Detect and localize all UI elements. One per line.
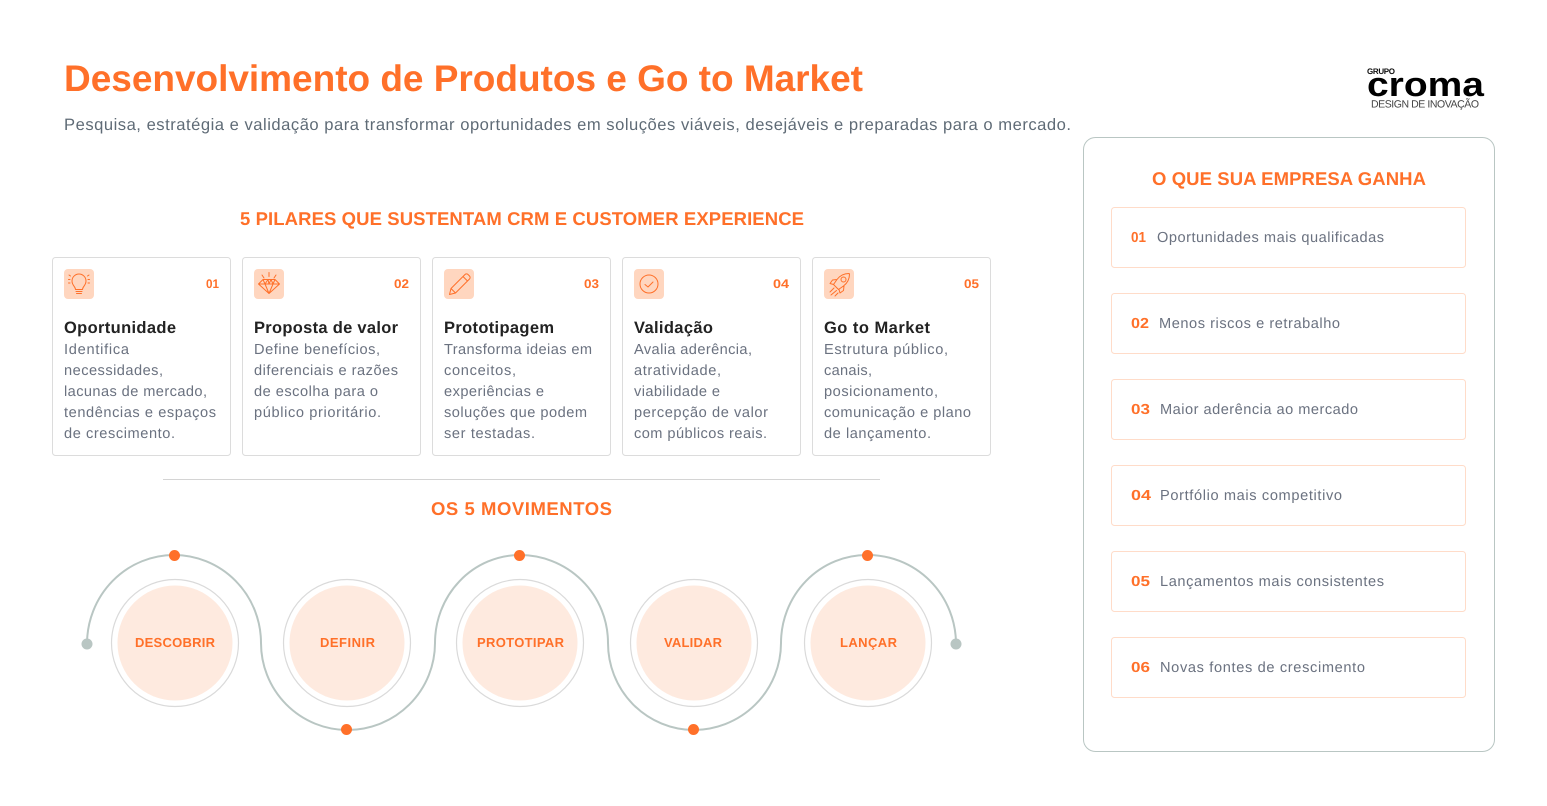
- panel: card 04 Validação: Validação: [634, 319, 713, 337]
- panel: card 03 Prototipagem: [432, 258, 610, 456]
- panel: card 02 Proposta de valor: 02: [394, 277, 409, 291]
- benefit 01: [1112, 208, 1466, 268]
- benefit 02: [1112, 294, 1466, 354]
- benefit 03: Maior aderência ao mercado: [1160, 402, 1358, 418]
- panel: card 05 Go to Market: Go to Market: [824, 319, 930, 337]
- panel: card 05 Go to Market: comunicação e plano: [824, 405, 971, 421]
- movement: Definir: [284, 580, 410, 706]
- benefit 01: 01: [1131, 230, 1146, 246]
- panel: card 05 Go to Market: Estrutura público,: [824, 342, 948, 358]
- benefit 04: [1112, 466, 1466, 526]
- panel: card 01 Oportunidade: [52, 258, 230, 456]
- benefit 01: Oportunidades mais qualificadas: [1157, 230, 1384, 246]
- panel: card 01 Oportunidade: Identifica: [64, 342, 130, 358]
- icon: diamond: [254, 269, 284, 299]
- panel: card 02 Proposta de valor: Proposta de valor: [254, 319, 399, 337]
- benefit 04: 04: [1131, 488, 1151, 504]
- panel: card 01 Oportunidade: tendências e espaços: [64, 405, 216, 421]
- movement: Lançar: [804, 580, 932, 706]
- benefit 06: 06: [1131, 660, 1150, 676]
- panel: card 05 Go to Market: 05: [964, 277, 979, 291]
- panel: card 02 Proposta de valor: diferenciais e razões: [254, 363, 398, 379]
- panel: card 02 Proposta de valor: público prioritário.: [254, 405, 381, 421]
- panel heading: O QUE SUA EMPRESA GANHA: [1152, 168, 1426, 189]
- wave markers: [82, 550, 962, 735]
- panel: card 04 Validação: 04: [773, 277, 789, 291]
- panel: card 01 Oportunidade: 01: [206, 277, 219, 291]
- panel: card 04 Validação: viabilidade e: [634, 384, 720, 400]
- movement: Definir: DEFINIR: [320, 635, 376, 650]
- panel: card 01 Oportunidade: de crescimento.: [64, 426, 175, 442]
- wave line: [87, 555, 956, 730]
- panel: card 03 Prototipagem: ser testadas.: [444, 426, 535, 442]
- logo: Grupo Croma: GRUPO: [1367, 67, 1395, 76]
- icon: rocket: [824, 269, 854, 299]
- benefit 03: 03: [1131, 402, 1150, 418]
- benefit 02: Menos riscos e retrabalho: [1159, 316, 1340, 332]
- movement: Prototipar: [456, 580, 584, 706]
- panel: card 03 Prototipagem: experiências e: [444, 384, 544, 400]
- panel: card 03 Prototipagem: Transforma ideias em: [444, 342, 592, 358]
- title: Desenvolvimento de Produtos e Go to Market: [64, 58, 863, 99]
- panel: card 01 Oportunidade: necessidades,: [64, 363, 163, 379]
- benefit 02: 02: [1131, 316, 1149, 332]
- panel: o que sua empresa ganha: [1084, 138, 1494, 752]
- subtitle: Pesquisa, estratégia e validação para transformar oportunidades em soluções viáveis, desejáveis e preparadas para o mercado.: [64, 115, 1071, 134]
- benefit 06: [1112, 638, 1466, 698]
- panel: card 05 Go to Market: posicionamento,: [824, 384, 938, 400]
- movement: Validar: VALIDAR: [664, 635, 723, 650]
- benefit 06: Novas fontes de crescimento: [1160, 660, 1365, 676]
- panel: card 02 Proposta de valor: Define benefícios,: [254, 342, 380, 358]
- benefit 05: [1112, 552, 1466, 612]
- icon: light bulb: [64, 269, 94, 299]
- panel: card 03 Prototipagem: conceitos,: [444, 363, 516, 379]
- movement: Validar: [630, 580, 758, 706]
- panel: card 03 Prototipagem: 03: [584, 277, 599, 291]
- panel: card 05 Go to Market: [812, 258, 990, 456]
- benefit 03: [1112, 380, 1466, 440]
- panel: card 05 Go to Market: canais,: [824, 363, 872, 379]
- panel: card 01 Oportunidade: Oportunidade: [64, 319, 176, 337]
- heading: 5 pilares: 5 PILARES QUE SUSTENTAM CRM E CUSTOMER EXPERIENCE: [240, 208, 804, 229]
- benefit 05: Lançamentos mais consistentes: [1160, 574, 1384, 590]
- logo: Grupo Croma: DESIGN DE INOVAÇÃO: [1371, 98, 1479, 110]
- panel: card 03 Prototipagem: soluções que podem: [444, 405, 587, 421]
- movement: Lançar: LANÇAR: [840, 635, 898, 650]
- panel: card 04 Validação: percepção de valor: [634, 405, 768, 421]
- icon: check circle: [634, 269, 664, 299]
- icon: pencil: [444, 269, 474, 299]
- benefit 04: Portfólio mais competitivo: [1160, 488, 1342, 504]
- panel: card 04 Validação: Avalia aderência,: [634, 342, 752, 358]
- movement: Prototipar: PROTOTIPAR: [477, 635, 565, 650]
- heading: os 5 movimentos: OS 5 MOVIMENTOS: [431, 498, 612, 519]
- panel: card 01 Oportunidade: lacunas de mercado,: [64, 384, 207, 400]
- panel: card 05 Go to Market: de lançamento.: [824, 426, 931, 442]
- chart: 5 movements wave: [82, 550, 962, 735]
- panel: card 02 Proposta de valor: [242, 258, 420, 456]
- panel: card 04 Validação: [622, 258, 800, 456]
- panel: card 02 Proposta de valor: de escolha para o: [254, 384, 378, 400]
- benefit 05: 05: [1131, 574, 1150, 590]
- panel: card 03 Prototipagem: Prototipagem: [444, 319, 554, 337]
- panel: card 04 Validação: atratividade,: [634, 363, 721, 379]
- logo: Grupo Croma: croma: [1367, 66, 1485, 104]
- movement: Descobrir: DESCOBRIR: [135, 635, 216, 650]
- movement: Descobrir: [112, 580, 238, 706]
- panel: card 04 Validação: com públicos reais.: [634, 426, 767, 442]
